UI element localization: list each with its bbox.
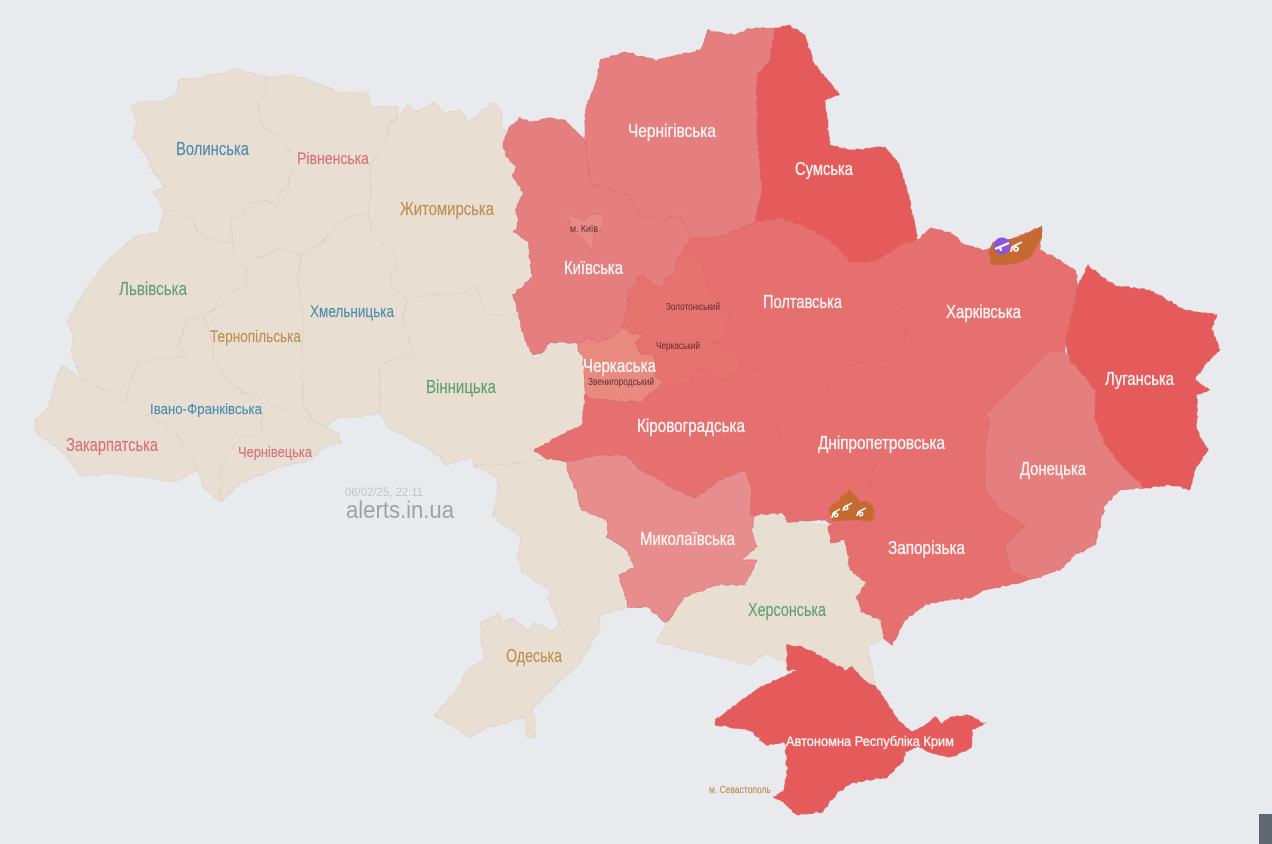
label: Zvenyhorod district: Звенигородський [588,377,654,388]
label: Donetsk: Донецька [1020,459,1087,479]
region: Zakarpattia [35,365,199,482]
label: Sevastopol: м. Севастополь [709,785,771,796]
label: Khmelnytskyi: Хмельницька [310,302,394,321]
label: Zhytomyr: Житомирська [400,199,495,219]
region: Dnipropetrovsk [745,345,990,528]
region: Odesa [435,460,634,738]
label: Crimea: Автономна Республіка Крим [786,733,954,749]
label: Ternopil: Тернопільська [210,327,301,346]
label: Kyiv oblast: Київська [564,258,624,278]
region: Kherson [657,513,883,685]
region: Lviv [67,208,246,402]
region: Zaporizhzhia [828,462,1030,645]
label: Luhansk: Луганська [1105,369,1175,389]
region: Volyn [131,69,294,243]
region: Ivano-Frankivsk [126,317,262,500]
region: Chernivtsi [218,403,341,500]
label: Kherson: Херсонська [748,600,827,620]
label: Cherkasky district: Черкаський [656,341,700,352]
icon: artillery glyph 2 [843,503,852,511]
label: Kyiv city: м. Київ [570,224,598,235]
region: Rivne [231,75,398,273]
region: Kyiv city [568,214,604,251]
region: Poltava [690,218,905,395]
label: Volyn: Волинська [176,139,250,159]
region: Luhansk [1065,265,1220,490]
label: Zakarpattia: Закарпатська [66,435,159,455]
watermark: alerts.in.ua [346,497,455,524]
region: Kharkiv [870,226,1078,415]
label: Lviv: Львівська [119,279,188,299]
icon: purple gun marker [994,238,1010,254]
label: Dnipropetrovsk: Дніпропетровська [818,433,946,453]
regions without alert (beige) [35,69,883,738]
label: Cherkasy: Черкаська [583,356,657,376]
region: Khmelnytskyi [297,214,412,428]
hotspot: Kharkiv border shelling zone [988,226,1042,265]
label: Poltava: Полтавська [763,292,843,312]
region: Vinnytsia [379,287,590,468]
label: Odesa: Одеська [506,646,563,666]
icon: gun glyph [995,243,1009,251]
timestamp: 06/02/25, 22:11 [345,485,423,499]
region: Crimea [715,645,985,815]
label: Mykolaiv: Миколаївська [640,529,736,549]
region: Cherkasy, Zvenyhorod district [578,327,665,402]
hotspot: Dnipro–Zaporizhzhia shelling zone [830,489,877,522]
label: Chernivtsi: Чернівецька [238,444,313,461]
region: Ternopil [204,248,314,422]
region: Sumy [755,25,918,262]
label: Kirovohrad: Кіровоградська [637,416,746,436]
label: Chernihiv: Чернігівська [628,121,717,141]
label: Kharkiv: Харківська [946,302,1022,322]
label: Zaporizhzhia: Запорізька [888,538,966,558]
icon: artillery glyph 1 [832,509,840,518]
label: Rivne: Рівненська [297,149,369,168]
region: Donetsk [985,350,1145,580]
region: Cherkasy, Zolotonisky and Cherkasky districts [622,252,740,385]
label: Zolotonisky district: Золотоніський [666,302,720,313]
icon: artillery glyph 3 [857,508,866,516]
region: Zhytomyr [368,102,533,315]
corner scrollbar block [1259,814,1272,844]
label: Ivano-Frankivsk: Івано-Франківська [150,401,263,418]
label: Vinnytsia: Вінницька [426,377,497,397]
base fill behind alert regions [600,170,1000,505]
icon: artillery glyph [1011,242,1022,252]
regions under alert (red) [503,25,1220,815]
region: Mykolaiv [567,455,757,623]
region: Chernihiv [585,28,775,238]
label: Sumy: Сумська [795,159,854,179]
region: Kirovohrad [534,363,805,498]
region: Kyiv oblast [503,118,690,355]
